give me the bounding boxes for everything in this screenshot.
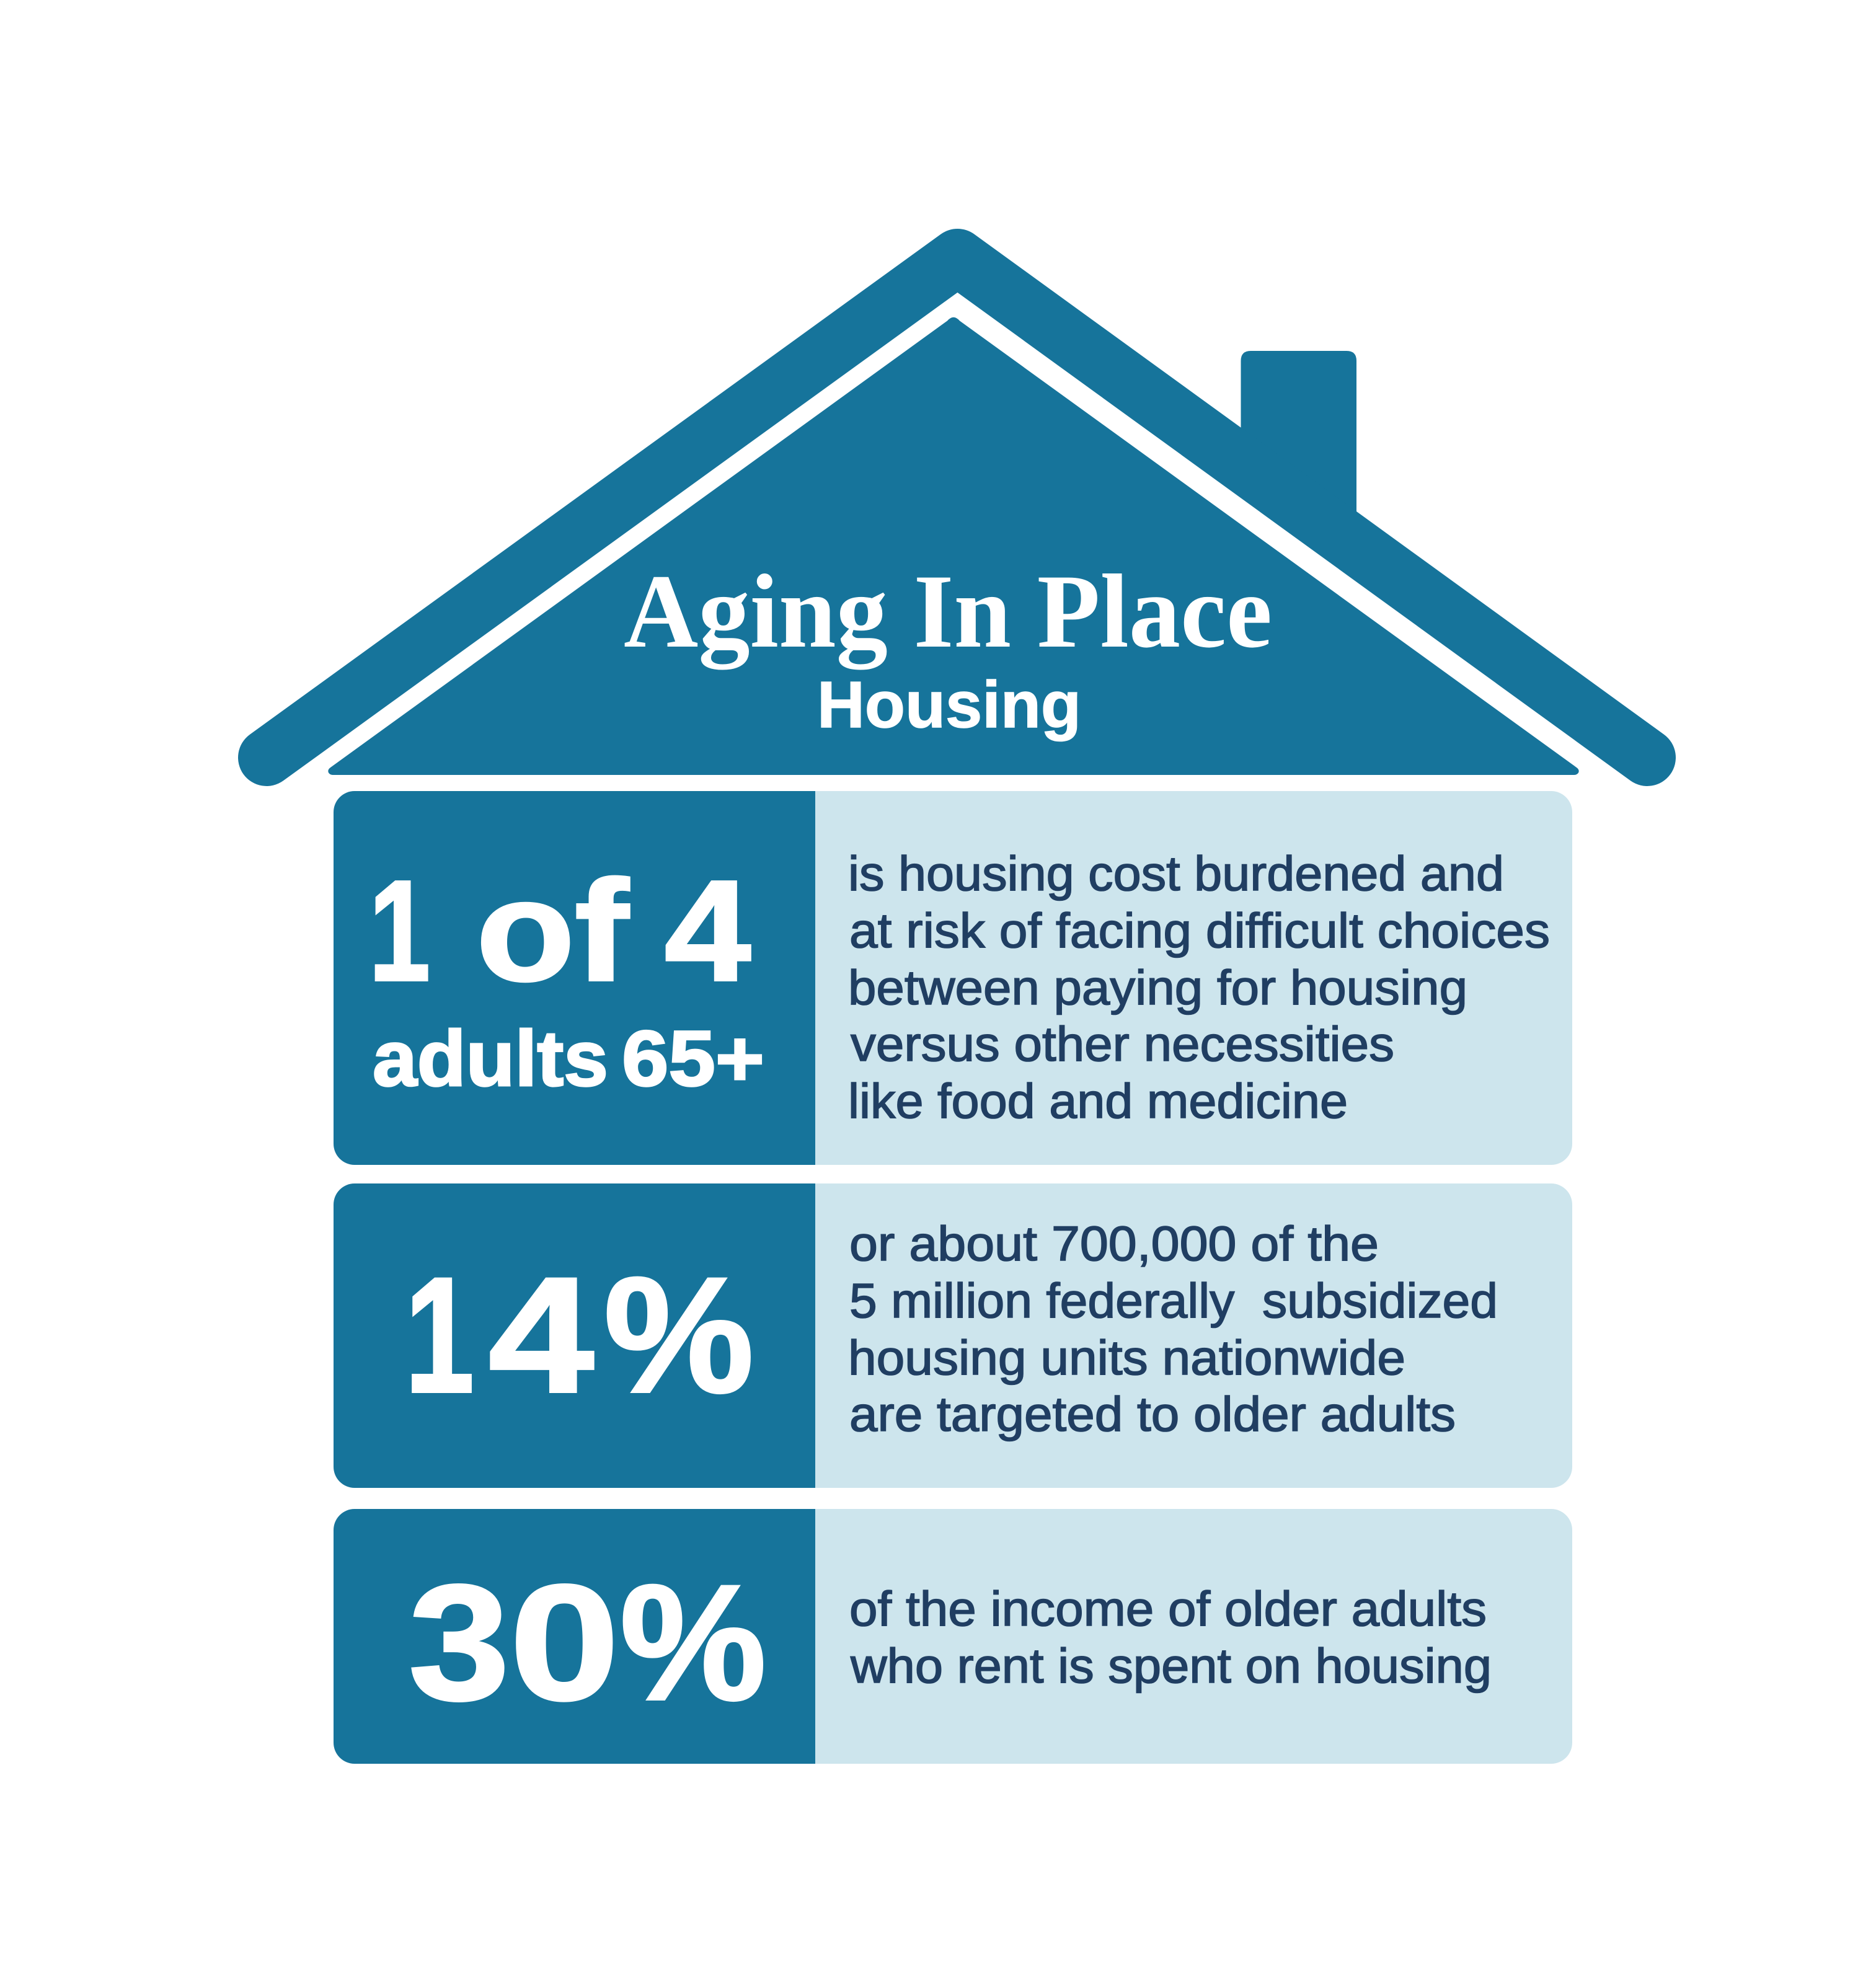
stat: 30%: 3 (409, 1551, 510, 1735)
house roof with chimney (267, 257, 1647, 758)
description text: like food and medicine (848, 1073, 1348, 1128)
description background (815, 791, 1572, 1165)
panel: 14 percent (334, 1183, 1572, 1488)
icon: chimney (1241, 351, 1356, 521)
stat: 14%: % (604, 1244, 754, 1427)
subtitle: Housing (817, 668, 1081, 741)
description text: at risk of facing difficult choices (849, 903, 1550, 958)
stat: 1 of 4 (369, 851, 751, 1011)
description text: is housing cost burdened and (848, 846, 1504, 901)
stat: 30%: 0 (510, 1551, 619, 1735)
description text (849, 1581, 1492, 1693)
stat background (334, 1509, 815, 1764)
stat label: adults 65+: adults (373, 1014, 608, 1102)
stat: 1 of 4: 4 (665, 851, 751, 1011)
description text (848, 1216, 1498, 1441)
description text: of the income of older adults (849, 1581, 1487, 1636)
description text: housing units nationwide (848, 1330, 1405, 1385)
stat: 14%: 4 (489, 1244, 595, 1427)
panel: house gable with title (328, 317, 1579, 775)
description text: versus other necessities (851, 1016, 1394, 1071)
description text: who rent is spent on housing (850, 1638, 1492, 1693)
stat: 1 of 4: 1 (369, 851, 430, 1011)
description text: are targeted to older adults (849, 1386, 1456, 1441)
title: Aging In Place (624, 553, 1272, 670)
stat label: adults 65+: 65+ (622, 1014, 764, 1102)
stat: 14% (405, 1244, 754, 1427)
description background (815, 1183, 1572, 1488)
description text: between paying for housing (848, 960, 1467, 1015)
gable triangle (328, 317, 1579, 775)
icon: roof outline (267, 257, 1647, 758)
stat: 1 of 4: of (476, 851, 629, 1011)
stat: 30%: % (620, 1551, 766, 1735)
panel: 1 of 4 adults (334, 791, 1572, 1165)
description background (815, 1509, 1572, 1764)
panel: 30 percent (334, 1509, 1572, 1764)
stat background (334, 791, 815, 1165)
description text (848, 846, 1550, 1128)
description text: or about 700,000 of the (849, 1216, 1379, 1271)
stat label: adults 65+ (373, 1014, 764, 1102)
description text: 5 million federally subsidized (849, 1273, 1498, 1328)
stat: 30% (409, 1551, 766, 1735)
stat: 14%: 1 (405, 1244, 474, 1427)
stat background (334, 1183, 815, 1488)
